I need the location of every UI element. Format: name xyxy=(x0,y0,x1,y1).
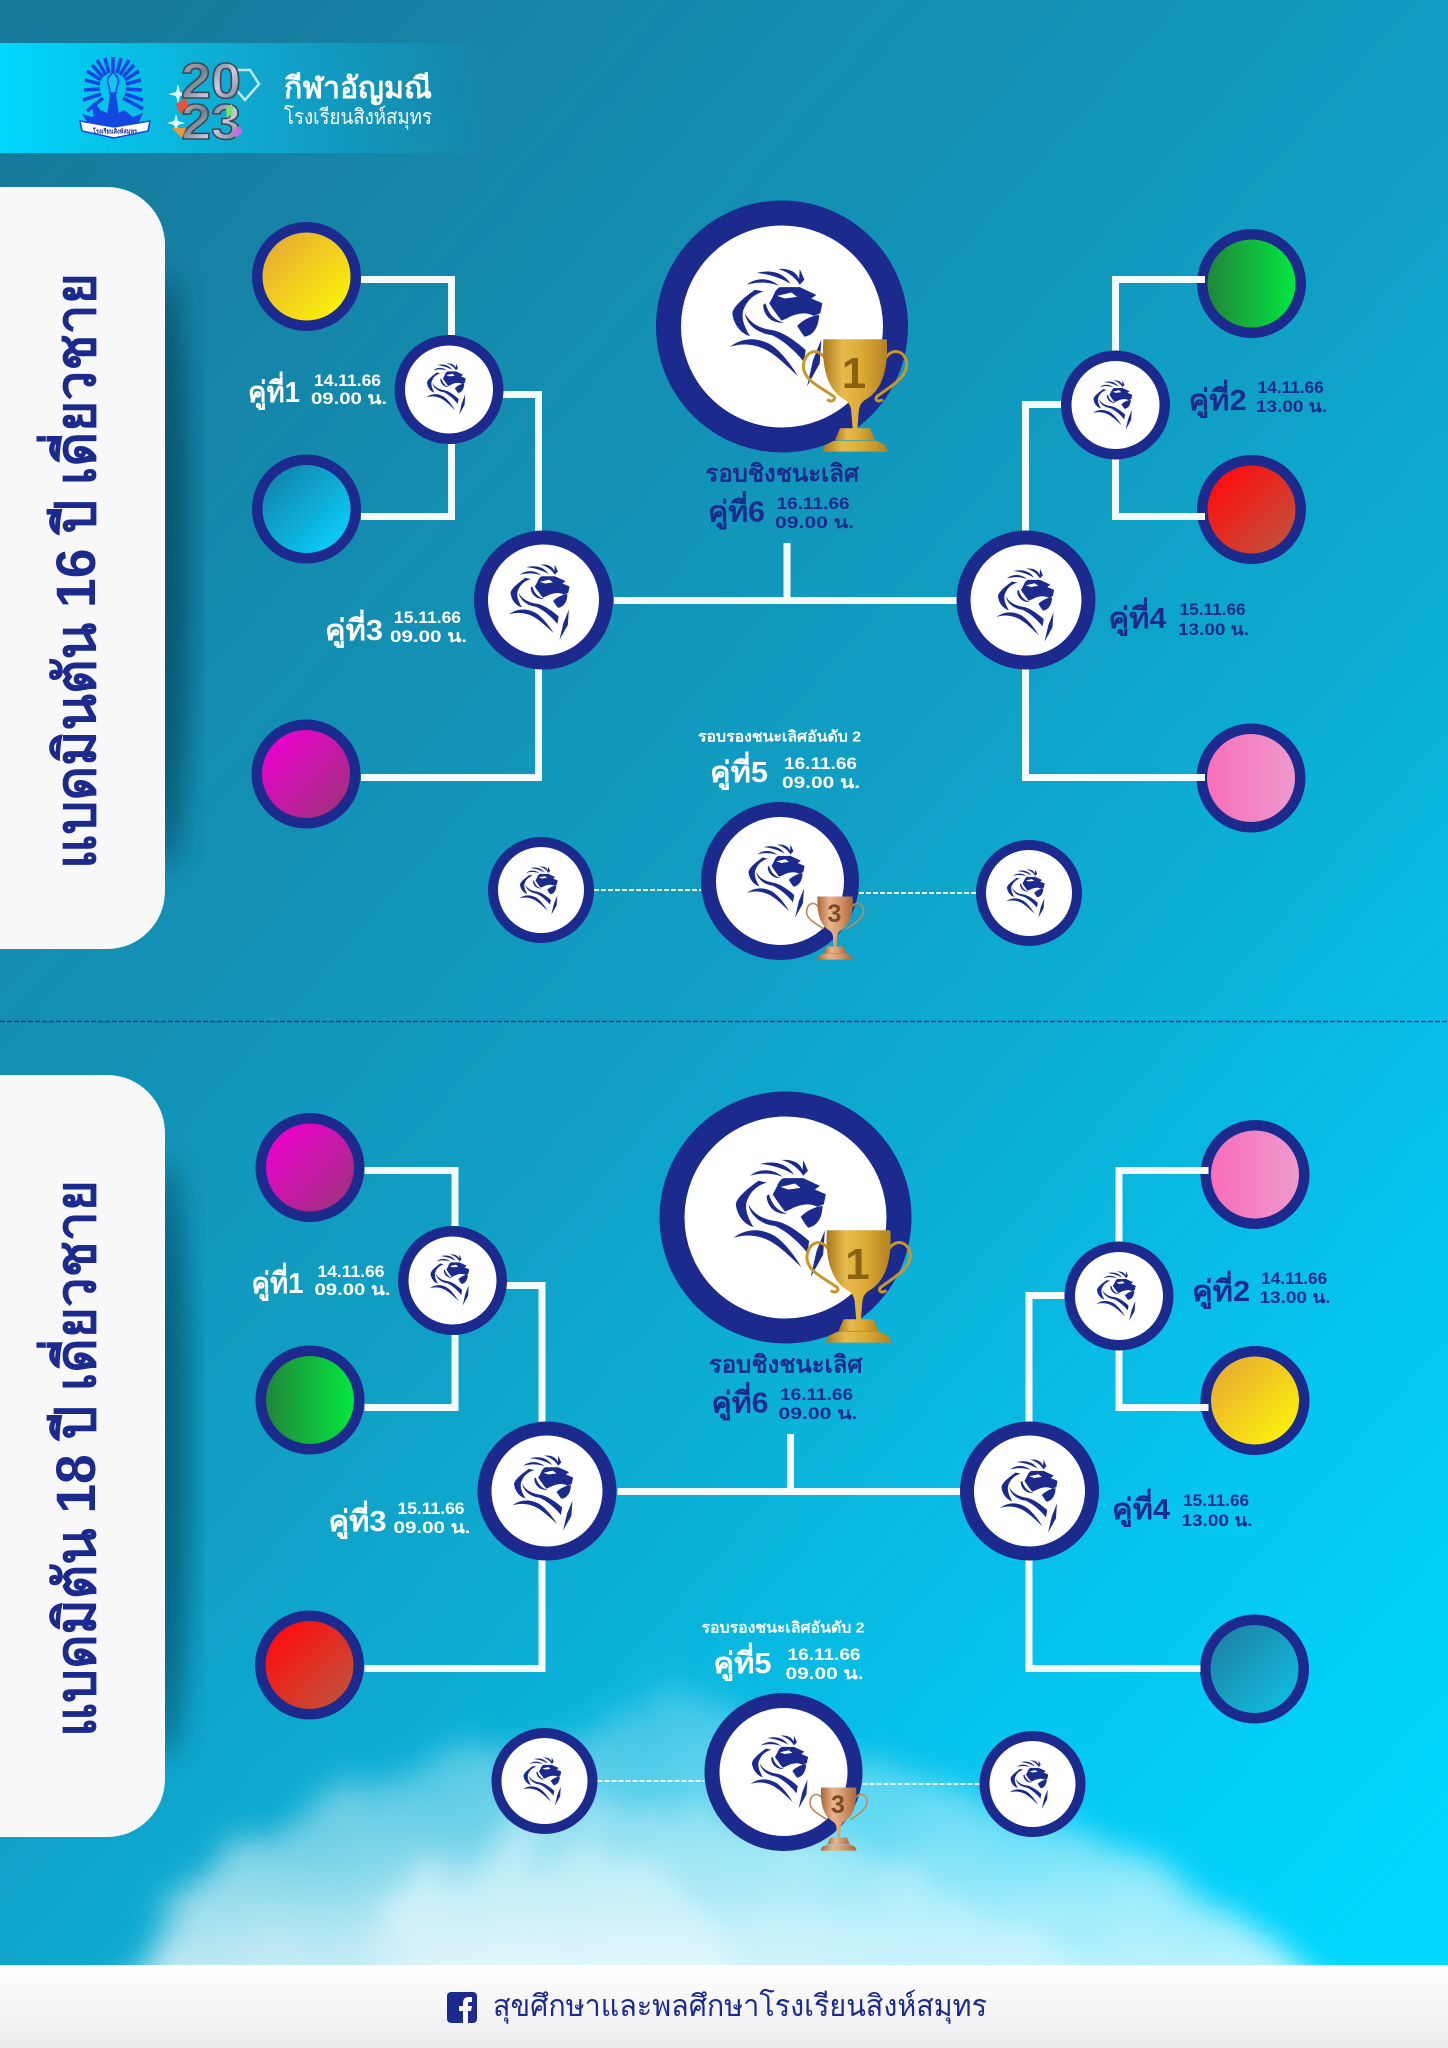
match 3 label: 09.00 น. xyxy=(390,627,467,646)
match 3 label: คู่ที่3 xyxy=(325,609,383,648)
match nodes xyxy=(400,340,1165,941)
match 5 label: คู่ที่5 xyxy=(710,751,768,790)
match 4 label: คู่ที่4 xyxy=(1108,597,1166,636)
match 4 label xyxy=(1108,597,1249,639)
bracket lines xyxy=(364,1170,1208,1668)
icon: bronze trophy: 3 xyxy=(831,1791,845,1819)
match 6 label: คู่ที่6 xyxy=(708,490,765,530)
match 2 label xyxy=(1192,1269,1330,1309)
icon: 2023 logo xyxy=(167,53,259,150)
icon: gold trophy xyxy=(807,1230,910,1343)
panel shadow: 18 years xyxy=(142,1160,190,1760)
match 4 label: 13.00 น. xyxy=(1182,1511,1252,1530)
match 3 label xyxy=(325,608,467,648)
match 6 label: 09.00 น. xyxy=(775,513,854,532)
match 4 label: 13.00 น. xyxy=(1178,620,1249,639)
final node xyxy=(672,1104,910,1343)
match nodes xyxy=(403,1231,1168,1832)
icon: 2023 logo: 23 xyxy=(181,94,241,150)
match 4 label xyxy=(1112,1488,1252,1530)
vertical title: แบดมิตัน 18 ปี เดี่ยวชาย xyxy=(36,1180,107,1737)
vertical title: แบดมินตัน 16 ปี เดี่ยวชาย xyxy=(36,273,107,869)
match 1 label: คู่ที่1 xyxy=(252,1262,304,1301)
third place node xyxy=(712,1700,867,1851)
bracket: 18 years xyxy=(252,1104,1330,1851)
subheading: โรงเรียนสิงห์สมุทร xyxy=(284,105,432,130)
match 2 label: คู่ที่2 xyxy=(1192,1270,1250,1309)
match 5 label: 09.00 น. xyxy=(786,1664,864,1683)
match 6 label: 09.00 น. xyxy=(778,1404,858,1423)
third place node xyxy=(708,810,864,960)
icon: bronze trophy xyxy=(807,897,864,960)
match 2 label: 14.11.66 xyxy=(1258,378,1324,397)
match 6 label xyxy=(706,460,860,532)
final node xyxy=(668,213,907,452)
icon: bronze trophy: 3 xyxy=(828,900,841,928)
icon: gold trophy: 1 xyxy=(845,1240,870,1289)
match 6 label: คู่ที่6 xyxy=(712,1382,768,1420)
icon: gold trophy: 1 xyxy=(842,349,866,398)
third place dashed lines xyxy=(598,1781,980,1784)
match 2 label: 14.11.66 xyxy=(1261,1269,1327,1288)
match 5 label: รอบรองชนะเลิศอันดับ 2 xyxy=(698,728,861,746)
match 2 label: คู่ที่2 xyxy=(1189,379,1247,418)
match 5 label: รอบรองชนะเลิศอันดับ 2 xyxy=(702,1618,864,1636)
match 6 label: 16.11.66 xyxy=(780,1385,853,1404)
match 3 label xyxy=(328,1499,470,1539)
cloud background xyxy=(110,1691,1380,2040)
match 5 label: 09.00 น. xyxy=(782,773,860,792)
match 1 label: 09.00 น. xyxy=(311,389,387,408)
icon: gold trophy xyxy=(803,339,907,452)
heading: กีฬาอัญมณี xyxy=(284,72,432,106)
match 5 label xyxy=(698,728,861,792)
team slots xyxy=(255,1113,1310,1724)
match 4 label: 15.11.66 xyxy=(1180,600,1246,619)
match 3 label: 09.00 น. xyxy=(394,1518,470,1537)
match 1 label xyxy=(248,371,387,410)
bracket lines xyxy=(361,280,1205,778)
icon: bronze trophy xyxy=(810,1788,867,1851)
match 1 label: 14.11.66 xyxy=(318,1262,384,1281)
match 3 label: 15.11.66 xyxy=(398,1499,464,1518)
icon: facebook xyxy=(447,1992,477,2023)
match 1 label: 14.11.66 xyxy=(314,371,381,390)
match 2 label xyxy=(1189,378,1327,418)
section divider xyxy=(0,1020,1448,1022)
footer xyxy=(0,1965,1448,2048)
match 1 label xyxy=(252,1262,390,1301)
match 1 label: 09.00 น. xyxy=(314,1280,390,1299)
footer text: สุขศึกษาและพลศึกษาโรงเรียนสิงห์สมุทร xyxy=(493,1988,987,2025)
match 6 label: รอบชิงชนะเลิศ xyxy=(709,1352,863,1378)
icon: 2023 logo: 20 xyxy=(181,53,241,109)
match 2 label: 13.00 น. xyxy=(1260,1288,1330,1307)
match 6 label: รอบชิงชนะเลิศ xyxy=(706,460,860,488)
third place dashed lines xyxy=(594,890,976,893)
match 1 label: คู่ที่1 xyxy=(248,371,300,410)
match 3 label: 15.11.66 xyxy=(394,608,461,627)
match 5 label: 16.11.66 xyxy=(788,1645,860,1664)
header band xyxy=(0,43,490,153)
match 5 label xyxy=(702,1618,864,1683)
match 5 label: คู่ที่5 xyxy=(714,1642,772,1681)
icon: school emblem: โรงเรียนสิงห์สมุทร xyxy=(92,126,137,136)
match 5 label: 16.11.66 xyxy=(784,754,857,773)
icon: school emblem xyxy=(80,57,150,138)
panel: title 16 years xyxy=(0,187,165,949)
match 3 label: คู่ที่3 xyxy=(328,1500,386,1539)
match 2 label: 13.00 น. xyxy=(1256,397,1327,416)
match 6 label: 16.11.66 xyxy=(777,494,850,513)
team slots xyxy=(252,222,1306,832)
match 6 label xyxy=(709,1352,863,1423)
bracket: 16 years xyxy=(248,213,1327,960)
panel shadow: 16 years xyxy=(142,270,190,870)
match 4 label: 15.11.66 xyxy=(1183,1491,1249,1510)
match 4 label: คู่ที่4 xyxy=(1112,1488,1170,1527)
panel: title 18 years xyxy=(0,1075,165,1837)
